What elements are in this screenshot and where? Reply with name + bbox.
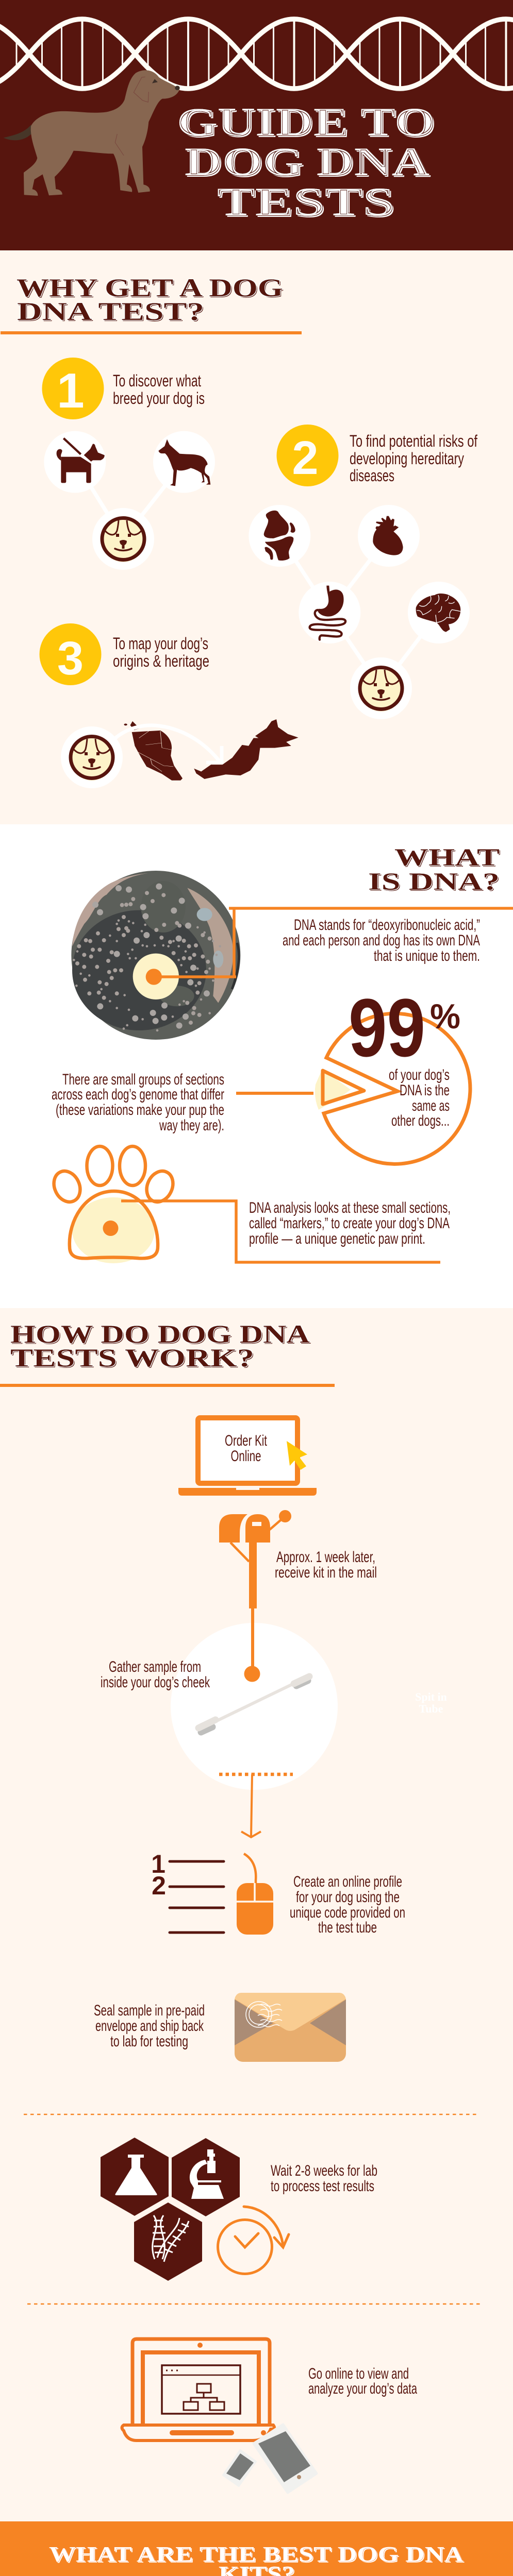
white circle: swab backdrop: [171, 1623, 338, 1790]
arrow to map: [114, 725, 223, 764]
stat: 99%: %: [430, 997, 460, 1036]
text: create profile: for your dog using the: [296, 1889, 400, 1906]
title: TESTS: [217, 179, 394, 224]
text: create profile: unique code provided on: [290, 1904, 405, 1921]
reason 2 badge: 2: [292, 432, 319, 484]
heading: DNA TEST?: [17, 297, 204, 326]
reason 1 text: breed your dog is: [113, 389, 205, 408]
text: view data: [308, 2365, 417, 2397]
text: paw print: [249, 1199, 451, 1247]
title: DOG DNA: [185, 139, 429, 184]
dotted divider: [219, 1773, 293, 1776]
dashed divider 2: [27, 2303, 483, 2304]
icon: numbered list: 1: [151, 1850, 166, 1878]
dna helix: [0, 19, 513, 89]
icon: numbered list: 2: [152, 1871, 166, 1900]
petri dish photo: [71, 871, 240, 1040]
text: gather sample: [101, 1658, 210, 1691]
icon: dog face 2: [350, 657, 412, 719]
callout line: paw: [121, 1201, 440, 1262]
heading: [10, 1319, 310, 1372]
text: create profile: [290, 1873, 405, 1936]
text: seal sample: [94, 2002, 205, 2050]
text: dna definition: [283, 917, 480, 964]
text: receive kit: receive kit in the mail: [275, 1564, 377, 1581]
pie chart: 99 percent: [315, 1013, 470, 1164]
text: stat caption: other dogs...: [391, 1112, 450, 1129]
banner heading: WHAT ARE THE BEST DOG DNA: [49, 2543, 464, 2567]
reason 2 badge: [276, 425, 338, 486]
reason 2 text: [350, 432, 477, 485]
text: wait for results: Wait 2-8 weeks for lab: [271, 2162, 377, 2179]
text: small groups: [52, 1071, 224, 1134]
text: receive kit: Approx. 1 week later,: [276, 1549, 375, 1566]
text: order kit online: Order Kit: [225, 1432, 267, 1449]
icon: dog face 1: [92, 508, 154, 570]
faint text: spit in tube: Tube: [419, 1702, 443, 1715]
dashed divider 1: [24, 2114, 479, 2115]
reason 3 text: origins & heritage: [113, 652, 209, 670]
callout line: dna definition: [154, 908, 513, 977]
heading: IS DNA?: [368, 868, 500, 895]
dog illustration: [4, 70, 180, 196]
icon: cursor: [287, 1441, 307, 1470]
panel: why get a dog dna test: [1, 273, 477, 788]
banner heading: [49, 2543, 464, 2576]
text: order kit online: Online: [231, 1448, 261, 1465]
arrow down: [241, 1774, 261, 1837]
icon: brain: [408, 582, 470, 643]
text: view data: analyze your dog’s data: [308, 2380, 417, 2397]
connector with dot: [244, 1608, 260, 1682]
text: gather sample: inside your dog’s cheek: [101, 1674, 210, 1691]
reason 3 badge: [39, 623, 101, 685]
icon: phones: [223, 2425, 317, 2493]
reason 2 text: diseases: [350, 466, 394, 485]
text: small groups: way they are).: [159, 1117, 224, 1134]
text: seal sample: Seal sample in pre-paid: [94, 2002, 205, 2019]
title: GUIDE TO: [177, 99, 435, 144]
icon: dog silhouette: [153, 431, 215, 493]
text: small groups: (these variations make your pup the: [56, 1101, 224, 1118]
reason 1 badge: 1: [57, 363, 85, 418]
connector lines: [75, 462, 439, 688]
callout line: small groups: [236, 1092, 313, 1095]
heading: [16, 273, 283, 326]
heading rule: [0, 1384, 335, 1387]
panel: what is dna: [0, 824, 513, 1308]
text: create profile: the test tube: [318, 1919, 377, 1936]
panel: how do dog dna tests work: [0, 1319, 483, 2493]
icon: clock: [218, 2207, 289, 2274]
heading: HOW DO DOG DNA: [10, 1319, 310, 1348]
text: wait for results: [271, 2162, 377, 2195]
icon: paw print: [49, 1146, 178, 1263]
reason 1 badge: [42, 358, 104, 419]
text: wait for results: to process test results: [271, 2178, 374, 2195]
text: seal sample: envelope and ship back: [95, 2018, 204, 2035]
faint text: spit in tube: [415, 1690, 447, 1715]
heading rule: [1, 331, 302, 334]
text: receive kit: [275, 1549, 377, 1581]
text: gather sample: Gather sample from: [109, 1658, 201, 1675]
text: create profile: Create an online profile: [293, 1873, 402, 1890]
heading: WHAT: [394, 844, 500, 871]
panel: header: [0, 0, 513, 250]
text: paw print: profile — a unique genetic paw print.: [249, 1230, 425, 1247]
text: stat caption: of your dog’s: [389, 1066, 450, 1083]
panel: best dog dna kits banner: [0, 2521, 513, 2576]
faint text: spit in tube: Spit in: [415, 1690, 447, 1703]
icon: dog face 3: [61, 726, 123, 788]
text: stat caption: same as: [412, 1097, 450, 1114]
icon: laptop results: [122, 2339, 274, 2441]
reason 3 text: [113, 634, 209, 670]
heading: WHY GET A DOG: [16, 273, 283, 302]
map of origins: [124, 719, 299, 781]
text: stat caption: DNA is the: [400, 1082, 450, 1099]
heading: TESTS WORK?: [10, 1343, 254, 1372]
icon: laptop order kit: [178, 1418, 317, 1496]
reason 1 text: [113, 371, 205, 408]
text: order kit online: [225, 1432, 267, 1465]
reason 3 badge: 3: [57, 632, 84, 685]
reason 2 text: developing hereditary: [350, 449, 464, 468]
text: view data: Go online to view and: [308, 2365, 409, 2382]
icon: heart: [358, 505, 420, 567]
text: seal sample: to lab for testing: [110, 2033, 188, 2050]
icon: stomach: [299, 582, 360, 643]
icon: mailbox: [219, 1510, 291, 1608]
text: small groups: There are small groups of sections: [62, 1071, 224, 1088]
text: stat caption: [389, 1066, 450, 1129]
icon: computer mouse: [237, 1854, 273, 1935]
heading: [368, 844, 500, 895]
reason 3 text: To map your dog’s: [113, 634, 208, 653]
title: [177, 99, 435, 224]
icon: lab hexagons: [101, 2138, 240, 2281]
reason 1 text: To discover what: [113, 371, 201, 390]
icon: dog on leash: [44, 431, 106, 493]
icon: cotton swab: [198, 1676, 309, 1732]
icon: envelope: [235, 1993, 346, 2062]
stat: 99%: 99: [349, 981, 425, 1074]
icon: joint: [249, 505, 310, 567]
text: small groups: across each dog’s genome that differ: [52, 1086, 224, 1103]
icon: numbered list: [151, 1850, 224, 1933]
